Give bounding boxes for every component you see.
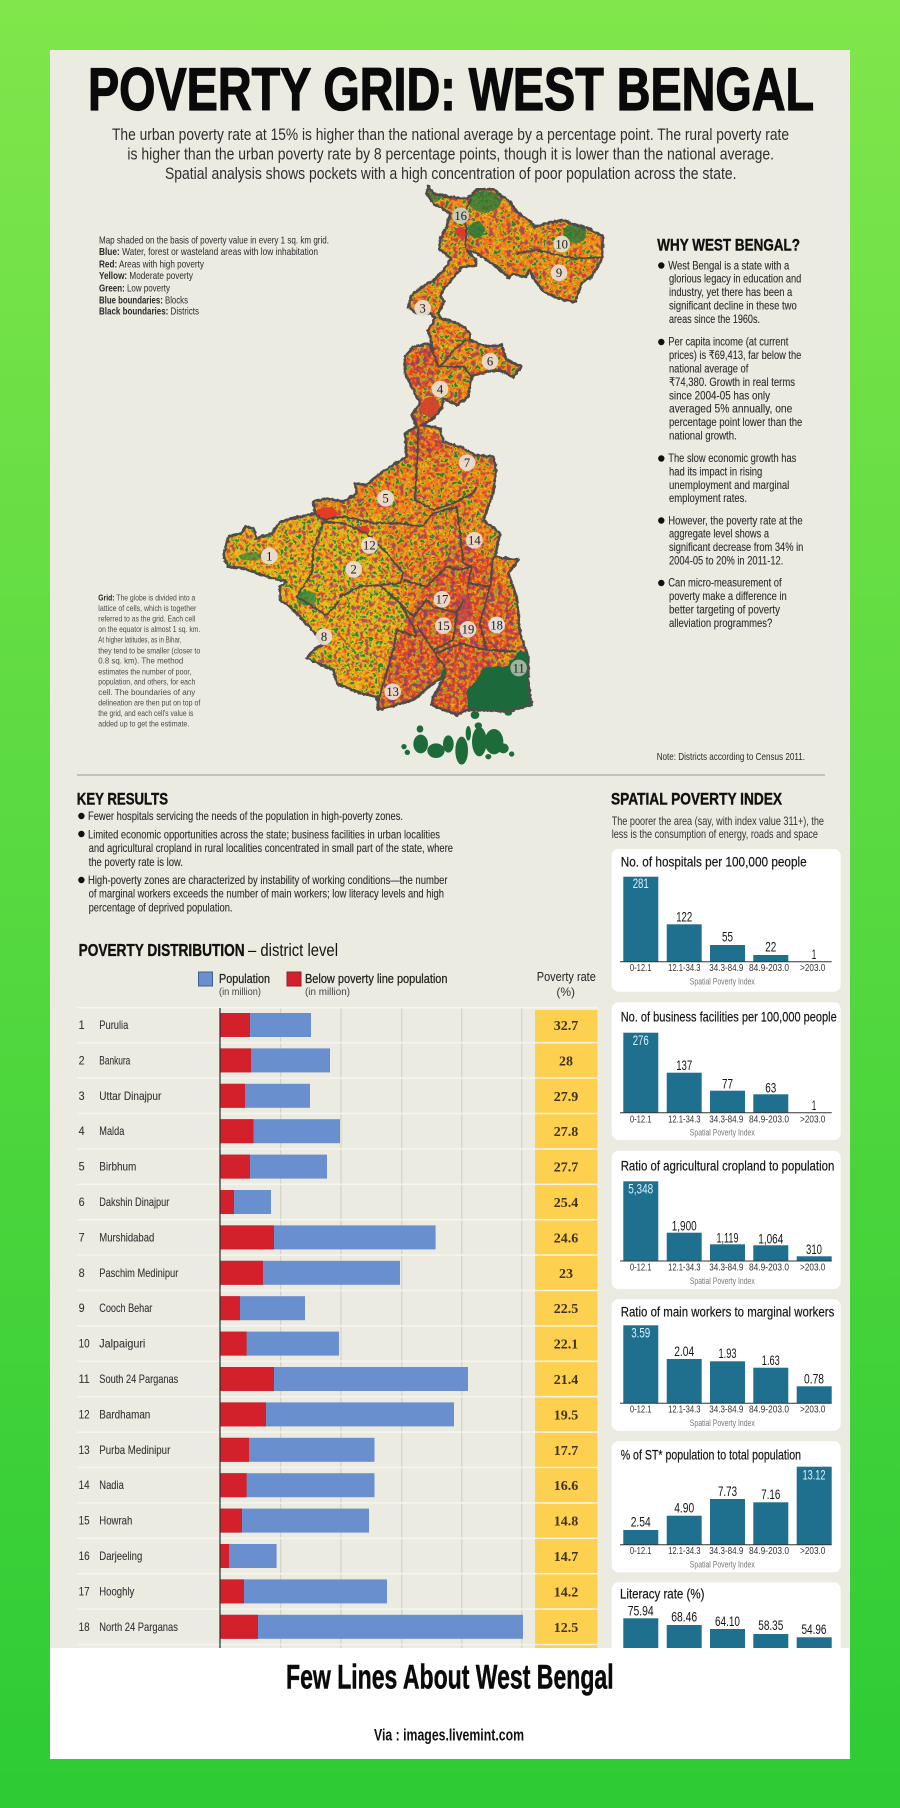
chart legend: Population: [219, 972, 270, 986]
bar chart: business facilities: 0-12.1: [630, 1113, 652, 1125]
row: Bardhaman: Bardhaman: [99, 1407, 150, 1421]
intro paragraph: Spatial analysis shows pockets with a high concentration of poor population across the state.: [165, 164, 736, 183]
bar chart: business facilities: 276: [633, 1033, 649, 1048]
row: Hooghly: 14.2: [554, 1585, 578, 1600]
row: Hooghly: 17: [79, 1584, 90, 1598]
row: Purba Medinipur: 13: [79, 1443, 90, 1457]
row: South 24 Parganas: 21.4: [554, 1373, 578, 1388]
row: Jalpaiguri: [79, 1332, 578, 1356]
row: Uttar Dinajpur: Uttar Dinajpur: [99, 1089, 161, 1103]
poverty rate column heading: Poverty rate: [537, 970, 596, 984]
bar chart: business facilities: Spatial Poverty Index: [690, 1128, 755, 1138]
bar chart: agricultural cropland: 0-12.1: [630, 1262, 652, 1274]
row: Howrah: 14.8: [554, 1515, 578, 1530]
bar chart: literacy rate: 64.10: [715, 1614, 740, 1629]
row: Cooch Behar: 22.5: [554, 1302, 578, 1317]
grid explanation text: cell. The boundaries of any: [98, 687, 196, 697]
key results text: Limited economic opportunities across the state; business facilities in urban localities: [88, 827, 440, 841]
bar chart: hospitals: 0-12.1: [630, 962, 652, 974]
bar chart: main to marginal workers: 34.3-84.9: [709, 1404, 743, 1416]
bullet text: had its impact in rising: [669, 464, 762, 478]
row: Bankura: [79, 1048, 573, 1072]
row: Uttar Dinajpur: 27.9: [554, 1090, 578, 1105]
bullet text: better targeting of poverty: [669, 602, 780, 616]
bar chart: main to marginal workers: 0-12.1: [630, 1404, 652, 1416]
district number markers: 18: [490, 618, 503, 632]
heading: key results: KEY RESULTS: [77, 789, 168, 808]
district number markers: 8: [321, 630, 327, 644]
bar chart: main to marginal workers: 1.93: [718, 1346, 736, 1361]
grid explanation text: on the equator is almost 1 sq. km.: [98, 624, 200, 634]
row: South 24 Parganas: [79, 1367, 578, 1391]
district number markers: 10: [555, 237, 568, 251]
row: Paschim Medinipur: 8: [79, 1266, 85, 1280]
row: Nadia: 16.6: [554, 1479, 578, 1494]
bar chart: main to marginal workers: 84.9-203.0: [749, 1404, 789, 1416]
chart legend: [198, 972, 448, 998]
bar chart: ST population: Spatial Poverty Index: [690, 1559, 755, 1569]
row: Malda: 27.8: [554, 1125, 578, 1140]
bar chart: agricultural cropland: [612, 1151, 841, 1289]
row: Purulia: Purulia: [99, 1018, 129, 1032]
grid explanation text: the grid, and each cell's value is: [98, 708, 193, 718]
row: Dakshin Dinajpur: 25.4: [554, 1196, 578, 1211]
bar chart: hospitals: 34.3-84.9: [709, 962, 743, 974]
bar chart: ST population: 7.73: [718, 1484, 737, 1499]
district number markers: 16: [454, 209, 467, 223]
row: Malda: 4: [79, 1124, 85, 1138]
bar chart: ST population: [612, 1441, 841, 1572]
bullet text: Per capita income (at current: [668, 335, 789, 349]
bar chart: literacy rate: Literacy rate (%): [620, 1585, 704, 1601]
row: Purba Medinipur: Purba Medinipur: [99, 1443, 170, 1457]
bullet text: since 2004-05 has only: [669, 388, 770, 402]
bar chart: business facilities: 63: [765, 1081, 776, 1096]
bullet text: significant decrease from 34% in: [669, 540, 803, 554]
bullet text: percentage point lower than the: [669, 415, 803, 429]
row: Darjeeling: 16: [79, 1549, 90, 1563]
row: Bankura: 2: [79, 1053, 85, 1067]
row: North 24 Parganas: 18: [79, 1620, 90, 1634]
bar chart: hospitals: 281: [633, 876, 649, 891]
row: Bardhaman: 19.5: [554, 1408, 578, 1423]
map of West Bengal: [222, 184, 605, 765]
bar chart: agricultural cropland: 1,119: [716, 1231, 738, 1246]
row: Nadia: 14: [79, 1478, 90, 1492]
grid explanation text: [98, 593, 201, 729]
bar chart: agricultural cropland: 310: [806, 1242, 822, 1257]
row: Paschim Medinipur: [79, 1261, 573, 1285]
bar chart: business facilities: 1: [812, 1098, 816, 1113]
bar chart: ST population: 34.3-84.9: [709, 1545, 743, 1557]
row: Jalpaiguri: Jalpaiguri: [99, 1337, 145, 1351]
bullet text: alleviation programmes?: [669, 616, 773, 630]
grid explanation text: lattice of cells, which is together: [98, 603, 196, 613]
bar chart: main to marginal workers: [612, 1299, 841, 1431]
bullet text: prices) is ₹69,413, far below the: [669, 348, 802, 362]
caption title: Few Lines About West Bengal: [286, 1658, 614, 1696]
bar chart: business facilities: 84.9-203.0: [749, 1113, 789, 1125]
grid explanation text: delineation are then put on top of: [98, 697, 201, 707]
bar chart: ST population: 12.1-34.3: [668, 1545, 701, 1557]
bullet markers: [658, 262, 664, 586]
panel: why West Bengal: [657, 236, 803, 630]
bar chart: literacy rate: [612, 1582, 841, 1662]
row: Cooch Behar: Cooch Behar: [99, 1301, 152, 1315]
bar chart: agricultural cropland: >203.0: [800, 1262, 825, 1274]
row: Hooghly: Hooghly: [99, 1584, 134, 1598]
row: Birbhum: 5: [79, 1160, 85, 1174]
bar chart: agricultural cropland: 1,064: [758, 1231, 784, 1246]
district number markers: 9: [556, 266, 562, 280]
key results text: [88, 809, 453, 914]
bar chart: main to marginal workers: 12.1-34.3: [668, 1404, 701, 1416]
map note: Note: Districts according to Census 2011.: [657, 751, 805, 763]
bar chart: ST population: 84.9-203.0: [749, 1545, 789, 1557]
row: Bardhaman: [79, 1402, 578, 1426]
key results bullet markers: [78, 813, 85, 883]
bar chart: business facilities: 34.3-84.9: [709, 1113, 743, 1125]
bar chart: agricultural cropland: Ratio of agricultural cropland to population: [621, 1158, 834, 1174]
district number markers: 12: [363, 539, 376, 553]
key results text: percentage of deprived population.: [89, 900, 232, 914]
source credit: Via : images.livemint.com: [374, 1726, 524, 1745]
map legend text: Green: Low poverty: [99, 282, 171, 294]
row: Malda: [79, 1119, 578, 1143]
district number markers: 1: [266, 549, 272, 563]
map legend text: [99, 234, 329, 318]
bar chart: agricultural cropland: Spatial Poverty Index: [690, 1276, 755, 1286]
district number markers: 6: [487, 355, 493, 369]
bar chart: hospitals: 84.9-203.0: [749, 962, 789, 974]
row: Purulia: 1: [79, 1018, 85, 1032]
bar chart: agricultural cropland: 1,900: [672, 1219, 697, 1234]
row: Purba Medinipur: [79, 1438, 578, 1462]
grid explanation text: At higher latitudes, as in Bihar,: [98, 635, 181, 645]
row: Darjeeling: [79, 1544, 578, 1568]
bullet text: glorious legacy in education and: [669, 272, 801, 286]
row: Jalpaiguri: 10: [79, 1337, 90, 1351]
bar chart: literacy rate: 68.46: [671, 1610, 697, 1625]
bullet text: West Bengal is a state with a: [668, 258, 790, 272]
spatial poverty index description: [612, 814, 824, 841]
bar chart: ST population: 13.12: [802, 1467, 826, 1482]
bullet text: Can micro-measurement of: [668, 576, 782, 590]
bar chart: hospitals: 1: [812, 947, 816, 962]
row: North 24 Parganas: North 24 Parganas: [99, 1620, 178, 1634]
row: Darjeeling: 14.7: [554, 1550, 578, 1565]
bar chart: agricultural cropland: 12.1-34.3: [668, 1262, 701, 1274]
bar chart: main to marginal workers: >203.0: [800, 1404, 825, 1416]
bar chart: business facilities: No. of business facilities per 100,000 people: [621, 1009, 837, 1025]
bar chart: hospitals: 55: [722, 930, 733, 945]
bar chart: ST population: % of ST* population to total population: [621, 1446, 801, 1462]
row: Howrah: [79, 1509, 578, 1533]
bar chart: business facilities: 77: [722, 1076, 733, 1091]
district number markers: 4: [437, 382, 444, 396]
bar chart: business facilities: 137: [676, 1058, 692, 1073]
bar chart: business facilities: [612, 1002, 841, 1140]
district number markers: 2: [351, 563, 357, 577]
row: Uttar Dinajpur: 3: [79, 1089, 85, 1103]
row: Purulia: [79, 1013, 578, 1037]
district number markers: [261, 207, 570, 700]
district number markers: 7: [464, 456, 470, 470]
bullet text: poverty make a difference in: [669, 589, 787, 603]
row: Malda: Malda: [99, 1124, 125, 1138]
row: Darjeeling: Darjeeling: [99, 1549, 142, 1563]
heading: why West Bengal: WHY WEST BENGAL?: [657, 236, 800, 255]
bar chart: hospitals: 22: [765, 940, 776, 955]
panel: key results: [77, 789, 453, 914]
row: Birbhum: Birbhum: [99, 1160, 136, 1174]
row: North 24 Parganas: 12.5: [554, 1621, 578, 1636]
row: Murshidabad: 7: [79, 1230, 85, 1244]
row: Birbhum: [79, 1155, 578, 1179]
row: South 24 Parganas: 11: [79, 1372, 90, 1386]
chart heading: POVERTY DISTRIBUTION: [79, 940, 245, 960]
bar chart: hospitals: >203.0: [800, 962, 825, 974]
bar chart: hospitals: [612, 849, 841, 992]
grid explanation text: added up to get the estimate.: [98, 719, 189, 729]
bullet text: averaged 5% annually, one: [669, 402, 793, 416]
bar chart: business facilities: 12.1-34.3: [668, 1113, 701, 1125]
key results text: of marginal workers exceeds the number of main workers; low literacy levels and high: [89, 887, 444, 901]
row: Paschim Medinipur: Paschim Medinipur: [99, 1266, 178, 1280]
bar chart: main to marginal workers: 3.59: [631, 1325, 650, 1340]
key results text: the poverty rate is low.: [89, 855, 183, 869]
bullet text: 2004-05 to 20% in 2011-12.: [669, 554, 783, 568]
row: Nadia: Nadia: [99, 1478, 124, 1492]
map legend text: Blue boundaries: Blocks: [99, 294, 188, 306]
bullet text: areas since the 1960s.: [669, 312, 760, 326]
spatial poverty index description: The poorer the area (say, with index value 311+), the: [612, 814, 824, 828]
bar chart: ST population: 7.16: [761, 1487, 780, 1502]
row: North 24 Parganas: [79, 1615, 578, 1639]
key results text: Fewer hospitals servicing the needs of the population in high-poverty zones.: [88, 809, 403, 823]
bar chart: main to marginal workers: 2.04: [674, 1344, 695, 1359]
row: Howrah: 15: [79, 1514, 90, 1528]
row: Purulia: 32.7: [554, 1019, 578, 1034]
chart legend: (in million): [219, 986, 261, 998]
grid explanation text: 0.8 sq. km). The method: [98, 656, 184, 666]
row: Bardhaman: 12: [79, 1407, 90, 1421]
intro paragraph: [112, 125, 789, 183]
bar chart: literacy rate: 58.35: [758, 1618, 783, 1633]
bar chart: main to marginal workers: Ratio of main workers to marginal workers: [621, 1304, 834, 1320]
bar chart: hospitals: No. of hospitals per 100,000 people: [621, 854, 807, 870]
district number markers: 15: [437, 619, 450, 633]
row: Bankura: Bankura: [99, 1053, 131, 1067]
bar chart: ST population: 2.54: [631, 1515, 651, 1530]
bar chart: literacy rate: 75.94: [628, 1604, 654, 1619]
grid explanation text: referred to as the grid. Each cell: [98, 613, 195, 623]
bar chart: ST population: 0-12.1: [630, 1545, 652, 1557]
bar chart: main to marginal workers: 1.63: [762, 1353, 780, 1368]
map legend text: Blue: Water, forest or wasteland areas with low inhabitation: [99, 246, 318, 258]
intro paragraph: is higher than the urban poverty rate by 8 percentage points, though it is lower than the national average.: [127, 144, 774, 164]
row: Cooch Behar: 9: [79, 1301, 85, 1315]
bar chart: main to marginal workers: Spatial Poverty Index: [690, 1418, 755, 1428]
grid explanation text: estimates the number of poor,: [98, 666, 191, 676]
bar chart: ST population: >203.0: [800, 1545, 825, 1557]
district number markers: 3: [420, 302, 426, 316]
row: Dakshin Dinajpur: [79, 1190, 578, 1214]
row: Nadia: [79, 1473, 578, 1497]
row: Murshidabad: Murshidabad: [99, 1230, 154, 1244]
grid explanation text: Grid: The globe is divided into a: [98, 593, 195, 603]
bar chart: business facilities: >203.0: [800, 1113, 825, 1125]
row: Uttar Dinajpur: [79, 1084, 578, 1108]
bullet text: industry, yet there has been a: [669, 285, 793, 299]
chart legend: (in million): [305, 986, 350, 998]
bar chart: agricultural cropland: 84.9-203.0: [749, 1262, 789, 1274]
row: Bankura: 28: [559, 1054, 573, 1069]
row: Murshidabad: [79, 1225, 578, 1249]
infographic panel: [50, 50, 850, 1650]
bullet text: However, the poverty rate at the: [668, 513, 803, 527]
bar chart: hospitals: Spatial Poverty Index: [690, 976, 755, 986]
bar chart: main to marginal workers: 0.78: [804, 1371, 824, 1386]
district number markers: 11: [513, 661, 525, 675]
map legend text: Map shaded on the basis of poverty value in every 1 sq. km grid.: [99, 234, 329, 246]
row: Purba Medinipur: 17.7: [554, 1444, 578, 1459]
bar chart: literacy rate: 54.96: [802, 1622, 826, 1637]
poverty rate column heading: (%): [556, 985, 575, 999]
grid explanation text: population, and others, for each: [98, 677, 195, 687]
row: Murshidabad: 24.6: [554, 1231, 578, 1246]
row: Hooghly: [79, 1579, 578, 1603]
district number markers: 13: [386, 685, 399, 699]
row: Jalpaiguri: 22.1: [554, 1338, 578, 1353]
bullet text: national growth.: [669, 428, 737, 442]
islands of the Sundarbans: [401, 711, 514, 765]
bullet text: ₹74,380. Growth in real terms: [669, 375, 795, 389]
bar chart: agricultural cropland: 5,348: [628, 1181, 653, 1196]
bar chart: agricultural cropland: 34.3-84.9: [709, 1262, 743, 1274]
row: Cooch Behar: [79, 1296, 578, 1320]
panel: spatial poverty index: [611, 789, 841, 1662]
bar chart: ST population: 4.90: [674, 1500, 694, 1515]
bullet text: [668, 258, 803, 630]
bullet text: national average of: [669, 362, 749, 376]
bullet text: unemployment and marginal: [669, 478, 789, 492]
chart heading: – district level: [248, 940, 338, 960]
bar chart: hospitals: 122: [676, 910, 692, 925]
district number markers: 5: [383, 492, 389, 506]
key results text: and agricultural cropland in rural localities concentrated in small part of the state, where: [89, 841, 453, 855]
heading: spatial poverty index: SPATIAL POVERTY INDEX: [611, 789, 783, 808]
panel: poverty distribution chart: [77, 940, 598, 1650]
bullet text: The slow economic growth has: [668, 451, 796, 465]
grid explanation text: they tend to be smaller (closer to: [98, 645, 200, 655]
bar chart: hospitals: 12.1-34.3: [668, 962, 701, 974]
chart legend: Below poverty line population: [305, 972, 448, 986]
key results text: High-poverty zones are characterized by instability of working conditions—the number: [88, 873, 448, 887]
row: Paschim Medinipur: 23: [559, 1267, 573, 1282]
row: Dakshin Dinajpur: Dakshin Dinajpur: [99, 1195, 169, 1209]
map legend text: Red: Areas with high poverty: [99, 258, 205, 270]
district number markers: 17: [436, 593, 448, 607]
map legend text: Black boundaries: Districts: [99, 306, 199, 318]
bullet text: employment rates.: [669, 491, 747, 505]
spatial poverty index description: less is the consumption of energy, roads and space: [612, 827, 818, 841]
poverty rate column background: [535, 1010, 598, 1650]
row: Howrah: Howrah: [99, 1514, 132, 1528]
district number markers: 14: [468, 534, 481, 548]
row: Birbhum: 27.7: [554, 1161, 578, 1176]
bottom caption band: [50, 1648, 850, 1759]
bullet text: significant decline in these two: [669, 298, 797, 312]
map legend text: Yellow: Moderate poverty: [99, 270, 194, 282]
poverty rate column heading: [537, 970, 596, 999]
bullet text: aggregate level shows a: [669, 527, 769, 541]
row: Dakshin Dinajpur: 6: [79, 1195, 85, 1209]
row: South 24 Parganas: South 24 Parganas: [99, 1372, 178, 1386]
district number markers: 19: [462, 623, 474, 637]
